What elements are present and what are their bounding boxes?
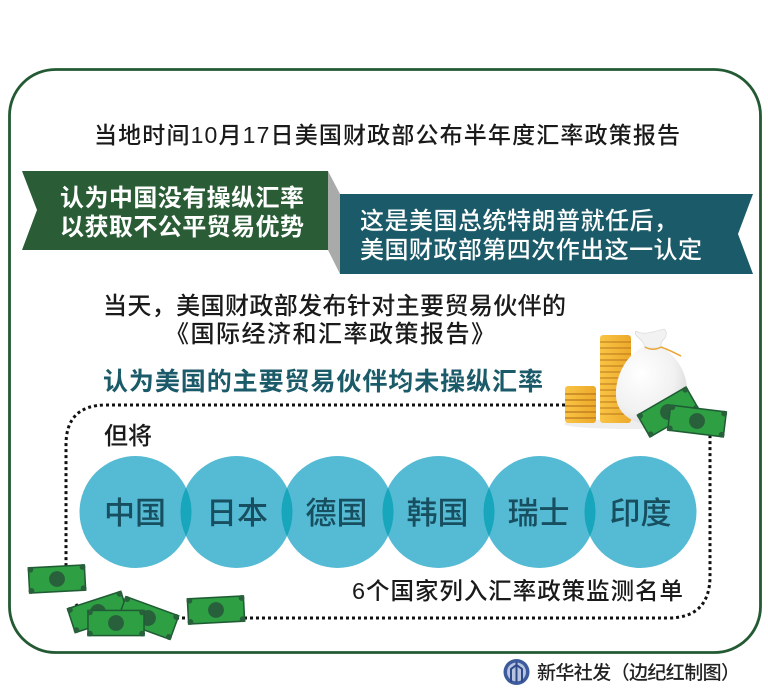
intro text: 当天，美国财政部发布针对主要贸易伙伴的 [103, 293, 566, 320]
tall coin stack [600, 335, 631, 423]
green ribbon text: 以获取不公平贸易优势 [60, 214, 304, 241]
label: but: 但将 [104, 423, 152, 450]
teal ribbon text [360, 208, 702, 264]
intro text: 《国际经济和汇率政策报告》 [165, 321, 495, 348]
icon: bills bottom left [27, 564, 180, 641]
country names: 韩国 [406, 496, 468, 531]
watchlist caption: 6个国家列入汇率政策监测名单 [352, 578, 683, 604]
ribbon: green conclusion [22, 171, 340, 274]
country names: 德国 [306, 496, 368, 531]
country names [104, 496, 672, 531]
icon: Xinhua logo [504, 659, 530, 685]
highlighted conclusion: 认为美国的主要贸易伙伴均未操纵汇率 [103, 368, 543, 396]
short coin stack [565, 386, 596, 423]
money bag [616, 329, 687, 425]
ribbon: teal note [340, 194, 753, 274]
teal ribbon text: 这是美国总统特朗普就任后， [360, 208, 678, 235]
intro text [103, 293, 566, 348]
icon: coins and money bag [564, 329, 727, 438]
country names: 日本 [206, 496, 268, 531]
green ribbon text: 认为中国没有操纵汇率 [60, 185, 304, 212]
dotted route [66, 405, 710, 618]
icon: single bill bottom [186, 595, 246, 625]
country names: 中国 [104, 496, 166, 531]
ribbon fold [328, 171, 340, 274]
bills on bag [636, 386, 700, 438]
title: 当地时间10月17日美国财政部公布半年度汇率政策报告 [94, 122, 680, 148]
country circles [80, 456, 696, 568]
teal ribbon text: 美国财政部第四次作出这一认定 [360, 237, 702, 264]
country names: 印度 [610, 496, 672, 531]
country names: 瑞士 [508, 496, 570, 531]
green ribbon shape [22, 171, 328, 250]
credit: 新华社发（边纪红制图） [537, 662, 740, 684]
green ribbon text [60, 185, 304, 241]
